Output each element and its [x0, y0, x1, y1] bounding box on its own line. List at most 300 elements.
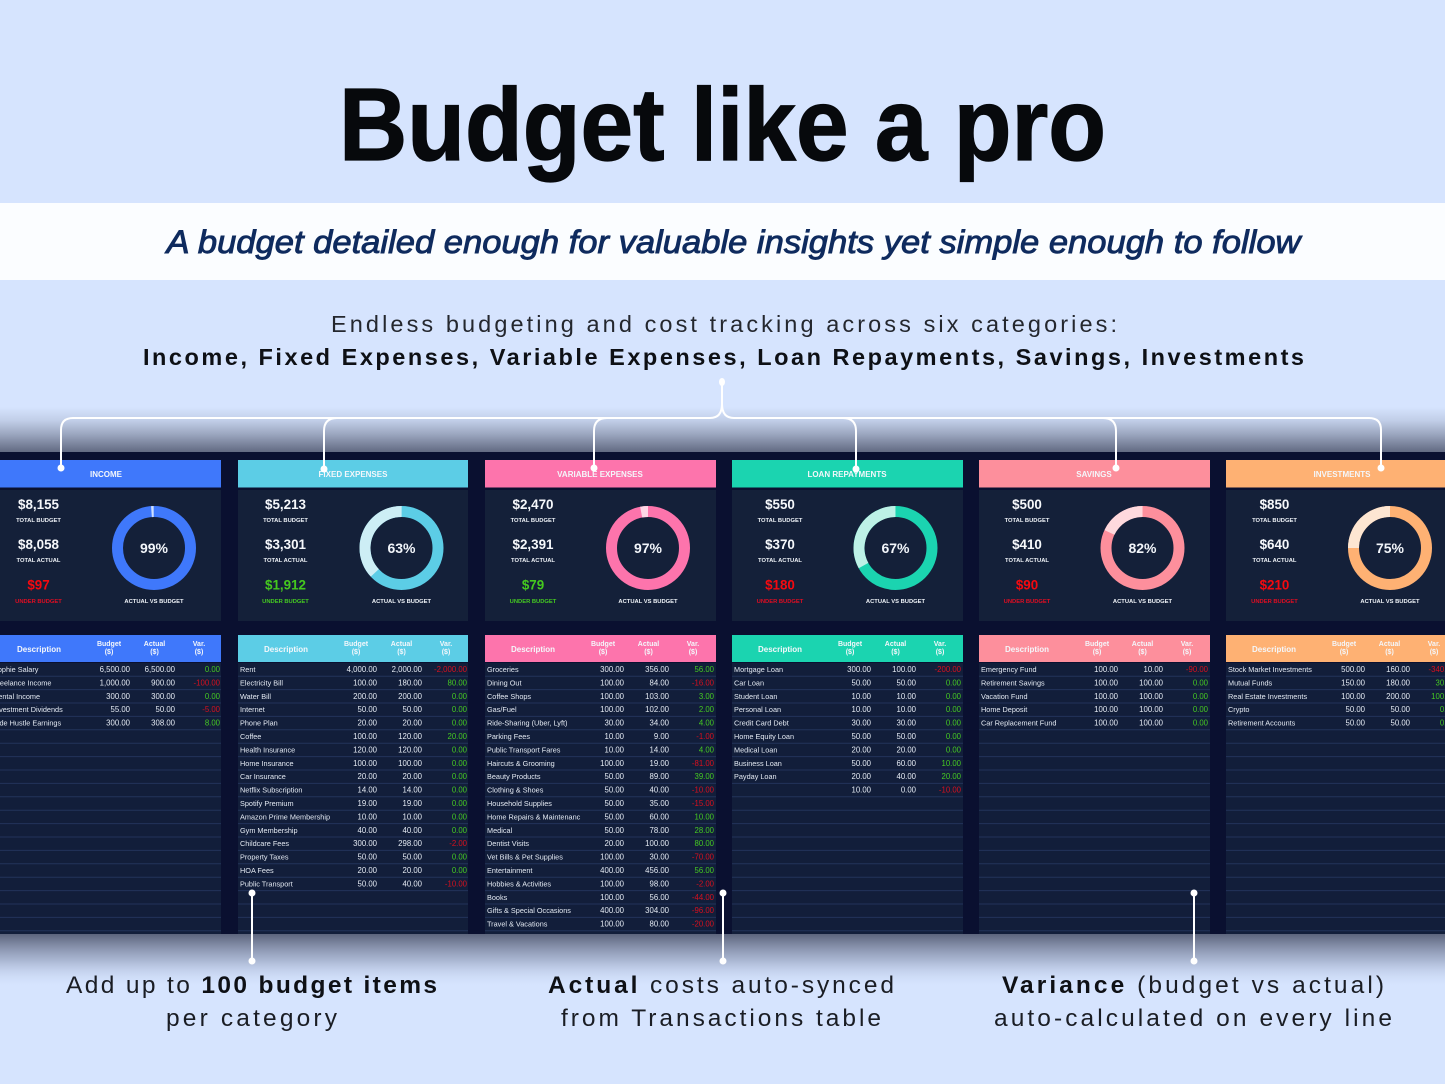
investments table: Var. — [1428, 641, 1440, 648]
variable expenses table: -16.00 — [692, 678, 715, 687]
variable expenses table: 100.00 — [600, 705, 625, 714]
investments donut: ACTUAL VS BUDGET — [1360, 599, 1420, 605]
loan repayments table: 50.00 — [896, 732, 917, 741]
loan repayments donut: ACTUAL VS BUDGET — [866, 599, 926, 605]
variable expenses table: 19.00 — [649, 759, 670, 768]
investments table: ($) — [1430, 649, 1438, 656]
variable expenses table: Dining Out — [487, 678, 521, 687]
fixed expenses table: 19.00 — [402, 799, 423, 808]
callout: budget items — [66, 972, 437, 1032]
loan repayments table: -200.00 — [935, 665, 962, 674]
variable expenses table: 100.00 — [600, 920, 625, 929]
income table: Var. — [193, 641, 205, 648]
income summary: TOTAL ACTUAL — [17, 558, 61, 564]
variable expenses table: Medical — [487, 826, 513, 835]
variable expenses table: Beauty Products — [487, 772, 541, 781]
loan repayments table: Budget — [838, 641, 863, 648]
fixed expenses table: 50.00 — [357, 853, 378, 862]
savings table: Emergency Fund — [981, 665, 1037, 674]
variable expenses table: Haircuts & Grooming — [487, 759, 555, 768]
loan repayments table: Business Loan — [734, 759, 782, 768]
fixed expenses table: 10.00 — [357, 812, 378, 821]
income table: 900.00 — [151, 678, 176, 687]
variable expenses summary: UNDER BUDGET — [510, 599, 557, 605]
fixed expenses table: 200.00 — [398, 692, 423, 701]
investments table: Budget — [1332, 641, 1357, 648]
loan repayments table: Credit Card Debt — [734, 719, 789, 728]
variable expenses table: -15.00 — [692, 799, 715, 808]
variable expenses table: 9.00 — [654, 732, 670, 741]
loan repayments table: 20.00 — [851, 745, 872, 754]
variable expenses table: 60.00 — [649, 812, 670, 821]
fixed expenses table: 0.00 — [452, 745, 468, 754]
loan repayments header — [732, 460, 963, 488]
variable expenses table: 50.00 — [604, 799, 625, 808]
fixed expenses table: 50.00 — [357, 879, 378, 888]
loan repayments summary: $550 — [765, 497, 795, 512]
investments table: 500.00 — [1341, 665, 1366, 674]
loan repayments table: Payday Loan — [734, 772, 777, 781]
savings table: 0.00 — [1193, 705, 1209, 714]
callout: budget items: per category — [166, 1005, 338, 1032]
income donut: ACTUAL VS BUDGET — [124, 599, 184, 605]
income summary — [0, 490, 221, 621]
fixed expenses table: 0.00 — [452, 759, 468, 768]
fixed expenses table: Rent — [240, 665, 255, 674]
loan repayments table: 30.00 — [896, 719, 917, 728]
fixed expenses table: 20.00 — [402, 772, 423, 781]
fixed expenses donut — [350, 496, 453, 605]
income header: INCOME — [90, 470, 123, 479]
savings table: ($) — [1183, 649, 1191, 656]
variable expenses table: Actual — [638, 641, 659, 648]
income table: 6,500.00 — [100, 665, 131, 674]
variable expenses table: 50.00 — [604, 772, 625, 781]
income table: -100.00 — [194, 678, 221, 687]
loan repayments table: 0.00 — [946, 732, 962, 741]
fixed expenses table: Public Transport — [240, 879, 293, 888]
fixed expenses table: 180.00 — [398, 678, 423, 687]
fixed expenses table: 0.00 — [452, 719, 468, 728]
panel: variable expenses — [485, 460, 716, 934]
loan repayments table: 50.00 — [851, 732, 872, 741]
income table: 300.00 — [106, 719, 131, 728]
fixed expenses table: 80.00 — [447, 678, 468, 687]
variable expenses table: ($) — [599, 649, 607, 656]
fixed expenses table: 14.00 — [357, 786, 378, 795]
variable expenses table: Entertainment — [487, 866, 532, 875]
income table: Actual — [144, 641, 165, 648]
variable expenses table: Parking Fees — [487, 732, 530, 741]
loan repayments table: 10.00 — [896, 692, 917, 701]
income table: ($) — [195, 649, 203, 656]
investments table: 160.00 — [1386, 665, 1411, 674]
variable expenses summary: $79 — [522, 578, 544, 592]
panel: savings — [979, 460, 1210, 934]
income table: ($) — [105, 649, 113, 656]
fixed expenses table: 20.00 — [402, 719, 423, 728]
variable expenses table: 100.00 — [600, 759, 625, 768]
variable expenses table: 39.00 — [694, 772, 715, 781]
variable expenses table: ($) — [689, 649, 697, 656]
callout: variance — [994, 972, 1392, 1032]
callout: actual costs: Actual costs auto-synced — [548, 972, 894, 999]
loan repayments table: 30.00 — [851, 719, 872, 728]
fixed expenses table: 120.00 — [398, 732, 423, 741]
variable expenses table: 10.00 — [694, 812, 715, 821]
variable expenses table: -70.00 — [692, 853, 715, 862]
variable expenses table: 50.00 — [604, 786, 625, 795]
fixed expenses table: Spotify Premium — [240, 799, 294, 808]
variable expenses table: 100.00 — [600, 893, 625, 902]
fixed expenses table: 4,000.00 — [347, 665, 378, 674]
loan repayments table: 10.00 — [851, 786, 872, 795]
variable expenses table: 100.00 — [600, 879, 625, 888]
panel: fixed expenses — [238, 460, 468, 934]
savings summary: TOTAL BUDGET — [1005, 518, 1050, 524]
fixed expenses table: 50.00 — [402, 705, 423, 714]
variable expenses summary: $2,391 — [513, 537, 554, 552]
income table: 55.00 — [110, 705, 131, 714]
variable expenses table: Budget — [591, 641, 616, 648]
investments table: Actual — [1379, 641, 1400, 648]
savings summary: $410 — [1012, 537, 1042, 552]
fixed expenses table: -2.00 — [449, 839, 468, 848]
savings summary: UNDER BUDGET — [1004, 599, 1051, 605]
callout connector: actual costs — [720, 890, 726, 964]
intro text: Endless budgeting and cost tracking across six categories: — [331, 311, 1117, 337]
investments table: 200.00 — [1386, 692, 1411, 701]
loan repayments table: 0.00 — [946, 705, 962, 714]
loan repayments table: 0.00 — [946, 719, 962, 728]
income table: -5.00 — [202, 705, 221, 714]
variable expenses table: 30.00 — [604, 719, 625, 728]
fixed expenses table: Childcare Fees — [240, 839, 289, 848]
fixed expenses table — [238, 635, 468, 934]
fixed expenses table: 20.00 — [357, 772, 378, 781]
fixed expenses table: Car Insurance — [240, 772, 286, 781]
variable expenses table: 100.00 — [600, 692, 625, 701]
fixed expenses table: 100.00 — [353, 732, 378, 741]
callout connector: variance — [1190, 890, 1198, 964]
variable expenses table: -10.00 — [692, 786, 715, 795]
fixed expenses table: 20.00 — [447, 732, 468, 741]
fixed expenses table: 100.00 — [353, 678, 378, 687]
loan repayments table: Personal Loan — [734, 705, 781, 714]
savings table: 100.00 — [1139, 705, 1164, 714]
income donut: 99% — [140, 540, 169, 556]
variable expenses donut: 97% — [634, 540, 663, 556]
fixed expenses table: Home Insurance — [240, 759, 294, 768]
loan repayments table: Actual — [885, 641, 906, 648]
fixed expenses table: 19.00 — [357, 799, 378, 808]
variable expenses table: 400.00 — [600, 866, 625, 875]
fixed expenses table: 120.00 — [353, 745, 378, 754]
variable expenses table: 40.00 — [649, 786, 670, 795]
variable expenses table: Household Supplies — [487, 799, 552, 808]
intro text — [143, 311, 1304, 370]
variable expenses table: 50.00 — [604, 826, 625, 835]
investments table: Description — [1252, 645, 1296, 654]
savings donut: ACTUAL VS BUDGET — [1113, 599, 1173, 605]
loan repayments table: 10.00 — [851, 705, 872, 714]
investments table: Crypto — [1228, 705, 1250, 714]
fixed expenses table: 200.00 — [353, 692, 378, 701]
variable expenses table: 34.00 — [649, 719, 670, 728]
fixed expenses summary: TOTAL ACTUAL — [264, 558, 308, 564]
investments summary: TOTAL ACTUAL — [1253, 558, 1297, 564]
investments summary: $850 — [1260, 497, 1289, 512]
variable expenses table: 400.00 — [600, 906, 625, 915]
loan repayments table: 50.00 — [896, 678, 917, 687]
income summary: TOTAL BUDGET — [16, 518, 61, 524]
variable expenses table: 4.00 — [699, 719, 715, 728]
fixed expenses table: 0.00 — [452, 786, 468, 795]
investments table: 180.00 — [1386, 678, 1411, 687]
savings table: 100.00 — [1139, 692, 1164, 701]
loan repayments header: LOAN REPAYMENTS — [807, 470, 887, 479]
savings table: 100.00 — [1094, 678, 1119, 687]
loan repayments table: ($) — [936, 649, 944, 656]
fixed expenses table: Gym Membership — [240, 826, 298, 835]
fixed expenses table: 300.00 — [353, 839, 378, 848]
fixed expenses table: 0.00 — [452, 853, 468, 862]
callout: actual costs — [548, 972, 894, 1032]
fixed expenses table: 20.00 — [357, 866, 378, 875]
fixed expenses summary — [238, 490, 468, 621]
fixed expenses table: 0.00 — [452, 866, 468, 875]
investments summary: TOTAL BUDGET — [1252, 518, 1297, 524]
variable expenses table: 10.00 — [604, 745, 625, 754]
loan repayments table: ($) — [846, 649, 854, 656]
fixed expenses summary: $1,912 — [265, 578, 306, 592]
loan repayments table: 20.00 — [941, 772, 962, 781]
fixed expenses donut: 63% — [387, 540, 416, 556]
loan repayments table: 20.00 — [851, 772, 872, 781]
panel: investments — [1226, 460, 1445, 934]
variable expenses table: Description — [511, 645, 555, 654]
variable expenses table: -20.00 — [692, 920, 715, 929]
savings table: 10.00 — [1143, 665, 1164, 674]
income table: ($) — [150, 649, 159, 656]
fixed expenses table: 0.00 — [452, 826, 468, 835]
variable expenses table: Home Repairs & Maintenanc — [487, 812, 581, 821]
fixed expenses table: Phone Plan — [240, 719, 278, 728]
variable expenses summary: $2,470 — [513, 497, 553, 512]
variable expenses table: -96.00 — [692, 906, 715, 915]
variable expenses table: 78.00 — [649, 826, 670, 835]
savings table: 100.00 — [1139, 678, 1164, 687]
loan repayments summary: TOTAL BUDGET — [758, 518, 803, 524]
loan repayments table: 0.00 — [946, 745, 962, 754]
savings table: 0.00 — [1193, 692, 1209, 701]
loan repayments table: 40.00 — [896, 772, 917, 781]
income donut — [115, 509, 193, 605]
variable expenses table: -81.00 — [692, 759, 715, 768]
investments table — [1226, 635, 1445, 934]
income table: 1,000.00 — [100, 678, 131, 687]
savings table: 100.00 — [1094, 705, 1119, 714]
fixed expenses table: 40.00 — [357, 826, 378, 835]
loan repayments table: 0.00 — [946, 678, 962, 687]
savings table: Var. — [1181, 641, 1193, 648]
variable expenses table: ($) — [644, 649, 653, 656]
income header — [0, 460, 221, 488]
loan repayments donut: 67% — [881, 540, 910, 556]
variable expenses table: Public Transport Fares — [487, 745, 561, 754]
loan repayments table: 300.00 — [847, 665, 872, 674]
variable expenses table: 300.00 — [600, 665, 625, 674]
fixed expenses table: 0.00 — [452, 799, 468, 808]
investments table: Real Estate Investments — [1228, 692, 1307, 701]
variable expenses table: 56.00 — [694, 665, 715, 674]
variable expenses summary — [485, 490, 716, 621]
variable expenses table: 10.00 — [604, 732, 625, 741]
variable expenses table: Clothing & Shoes — [487, 786, 544, 795]
income table: 6,500.00 — [145, 665, 176, 674]
savings table: 100.00 — [1094, 692, 1119, 701]
loan repayments table: 10.00 — [896, 705, 917, 714]
loan repayments table: 10.00 — [851, 692, 872, 701]
fixed expenses table: 50.00 — [357, 705, 378, 714]
callout: budget items: Add up to 100 budget items — [66, 972, 437, 999]
loan repayments summary: TOTAL ACTUAL — [758, 558, 802, 564]
variable expenses table: 84.00 — [649, 678, 670, 687]
fixed expenses table: Amazon Prime Membership — [240, 812, 330, 821]
fixed expenses table: -10.00 — [445, 879, 468, 888]
loan repayments table: 100.00 — [892, 665, 917, 674]
savings table: Budget — [1085, 641, 1110, 648]
income table: Budget — [97, 641, 122, 648]
loan repayments table — [732, 635, 963, 934]
variable expenses table: 89.00 — [649, 772, 670, 781]
loan repayments donut — [846, 498, 945, 605]
savings table: Retirement Savings — [981, 678, 1045, 687]
savings summary: TOTAL ACTUAL — [1005, 558, 1049, 564]
income summary: UNDER BUDGET — [15, 599, 62, 605]
fixed expenses table: Actual — [391, 641, 412, 648]
fixed expenses table: 0.00 — [452, 812, 468, 821]
variable expenses table: 20.00 — [604, 839, 625, 848]
variable expenses table: Var. — [687, 641, 699, 648]
variable expenses table: 80.00 — [694, 839, 715, 848]
fixed expenses header — [238, 460, 468, 488]
investments table: 50.00 — [1390, 705, 1411, 714]
subtitle band: A budget detailed enough for valuable insights yet simple enough to follow — [164, 224, 1303, 260]
loan repayments summary: $370 — [765, 537, 795, 552]
fixed expenses summary: UNDER BUDGET — [262, 599, 309, 605]
fixed expenses summary: $5,213 — [265, 497, 306, 512]
savings table: Actual — [1132, 641, 1153, 648]
variable expenses table: -1.00 — [696, 732, 715, 741]
savings table — [979, 635, 1210, 934]
savings table: 100.00 — [1094, 719, 1119, 728]
variable expenses table: 100.00 — [645, 839, 670, 848]
income summary: $8,058 — [18, 537, 60, 552]
fixed expenses table: 100.00 — [353, 759, 378, 768]
dashboard — [0, 452, 1445, 934]
savings donut: 82% — [1128, 540, 1157, 556]
fixed expenses table: ($) — [442, 649, 450, 656]
fixed expenses table: ($) — [397, 649, 406, 656]
savings header: SAVINGS — [1076, 470, 1112, 479]
income table: Description — [17, 645, 61, 654]
investments table: Mutual Funds — [1228, 678, 1273, 687]
variable expenses table: 102.00 — [645, 705, 670, 714]
income table — [0, 635, 221, 934]
variable expenses table: 50.00 — [604, 812, 625, 821]
investments summary: UNDER BUDGET — [1251, 599, 1298, 605]
fixed expenses table: Electricity Bill — [240, 678, 283, 687]
fixed expenses table: 50.00 — [402, 853, 423, 862]
callout connector: budget items — [248, 890, 256, 964]
loan repayments table: Student Loan — [734, 692, 777, 701]
investments table: 50.00 — [1390, 719, 1411, 728]
variable expenses table: 98.00 — [649, 879, 670, 888]
fixed expenses table: Netflix Subscription — [240, 786, 302, 795]
bracket connector to six categories — [58, 378, 1384, 472]
variable expenses table: 3.00 — [699, 692, 715, 701]
variable expenses table: 35.00 — [649, 799, 670, 808]
investments donut: 75% — [1376, 540, 1405, 556]
variable expenses summary: TOTAL BUDGET — [511, 518, 556, 524]
variable expenses donut — [605, 505, 691, 605]
investments table: 150.00 — [1341, 678, 1366, 687]
income summary: $8,155 — [18, 497, 60, 512]
variable expenses table: 2.00 — [699, 705, 715, 714]
loan repayments table: 0.00 — [946, 692, 962, 701]
variable expenses table: Hobbies & Activities — [487, 879, 551, 888]
fixed expenses table: Var. — [440, 641, 452, 648]
variable expenses table: 14.00 — [649, 745, 670, 754]
fixed expenses table: Description — [264, 645, 308, 654]
loan repayments table: Var. — [934, 641, 946, 648]
fixed expenses table: 0.00 — [452, 772, 468, 781]
variable expenses table: Groceries — [487, 665, 519, 674]
variable expenses table: 4.00 — [699, 745, 715, 754]
variable expenses table: 304.00 — [645, 906, 670, 915]
income table: 8.00 — [205, 719, 221, 728]
investments summary: $640 — [1260, 537, 1289, 552]
fixed expenses table: Property Taxes — [240, 853, 289, 862]
loan repayments table: -10.00 — [939, 786, 962, 795]
variable expenses table: 30.00 — [649, 853, 670, 862]
loan repayments table: Mortgage Loan — [734, 665, 783, 674]
income table: 0.00 — [205, 692, 221, 701]
fixed expenses table: 0.00 — [452, 692, 468, 701]
loan repayments summary: $180 — [765, 578, 795, 592]
variable expenses table: Books — [487, 893, 508, 902]
variable expenses table: 356.00 — [645, 665, 670, 674]
variable expenses summary: TOTAL ACTUAL — [511, 558, 555, 564]
loan repayments table: Medical Loan — [734, 745, 777, 754]
loan repayments table: 0.00 — [901, 786, 917, 795]
savings table: Description — [1005, 645, 1049, 654]
title: Budget like a pro — [339, 67, 1106, 182]
investments donut — [1354, 512, 1426, 605]
fixed expenses table: 14.00 — [402, 786, 423, 795]
investments header: INVESTMENTS — [1314, 470, 1371, 479]
variable expenses table: 56.00 — [649, 893, 670, 902]
variable expenses table: 100.00 — [600, 678, 625, 687]
variable expenses table: 80.00 — [649, 920, 670, 929]
income table: 300.00 — [106, 692, 131, 701]
fixed expenses table: Budget — [344, 641, 369, 648]
fixed expenses table: Health Insurance — [240, 745, 295, 754]
income table: 308.00 — [151, 719, 176, 728]
fixed expenses summary: $3,301 — [265, 537, 307, 552]
investments table: ($) — [1385, 649, 1394, 656]
